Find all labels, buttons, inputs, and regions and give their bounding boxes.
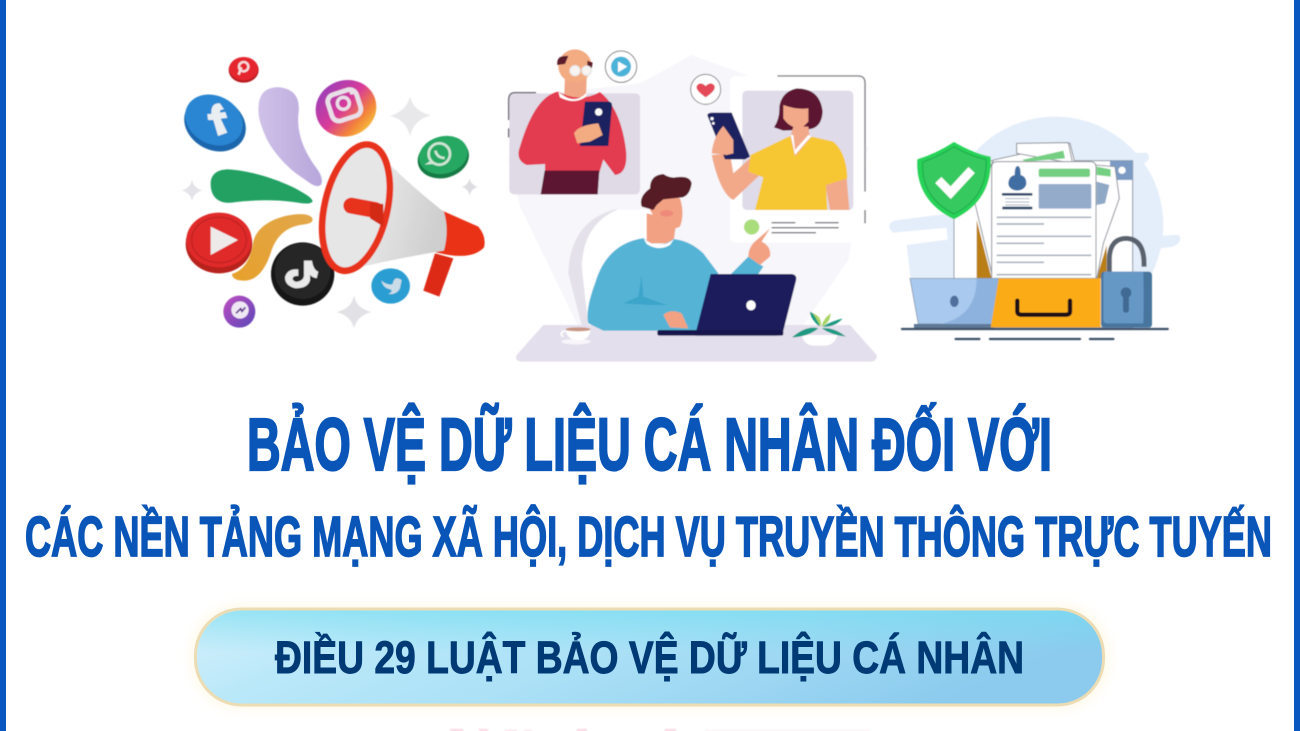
desk	[516, 325, 877, 362]
icon: play bubble	[605, 51, 637, 82]
icon: small sparkle left	[181, 179, 203, 201]
ground lines	[902, 329, 1168, 339]
icon: messenger	[223, 296, 255, 328]
post lines with avatar	[744, 219, 839, 235]
icon: instagram	[308, 72, 384, 145]
icon: green check shield	[917, 142, 991, 219]
yellow folder	[991, 278, 1101, 327]
illustration: people using social media online	[508, 49, 877, 362]
icon: tiktok	[271, 242, 334, 306]
icon: youtube	[186, 213, 252, 273]
browser window	[954, 161, 1133, 327]
icon: heart bubble	[691, 74, 721, 104]
icon: sparkle	[390, 96, 431, 137]
icon: twitter	[371, 268, 410, 304]
card behind woman	[730, 76, 865, 243]
shape: purple splash	[258, 87, 322, 186]
chair	[568, 209, 667, 325]
icon: megaphone	[311, 138, 485, 297]
panel: man with phone	[509, 49, 640, 194]
icon: potted plant	[792, 312, 846, 346]
illustration: megaphone and social media icons	[175, 57, 485, 329]
panel: woman with phone	[707, 88, 853, 210]
icon: pinterest	[229, 57, 259, 83]
icon: sparkle bottom	[337, 295, 371, 329]
icon: small sparkle right	[462, 178, 478, 196]
icon: padlock	[1101, 238, 1152, 328]
banner text: ĐIỀU 29 LUẬT BẢO VỆ DỮ LIỆU CÁ NHÂN	[275, 632, 1024, 683]
icon: coffee cup	[561, 327, 591, 344]
icon: facebook	[175, 85, 255, 162]
back document pages	[975, 143, 1119, 280]
shape: golden splash	[232, 214, 313, 281]
laptop	[910, 278, 998, 328]
background shield shape	[508, 55, 868, 330]
icon: whatsapp	[413, 131, 474, 184]
front document: personal profile	[992, 162, 1096, 278]
shape: green splash	[211, 169, 313, 204]
illustration: data security documents	[889, 117, 1180, 339]
banner: legal article	[190, 604, 1110, 710]
cropped pink marks at bottom edge	[450, 729, 870, 731]
pale blue backdrop	[889, 116, 1180, 278]
figure: man at laptop	[587, 174, 796, 336]
folder back	[977, 220, 1107, 278]
